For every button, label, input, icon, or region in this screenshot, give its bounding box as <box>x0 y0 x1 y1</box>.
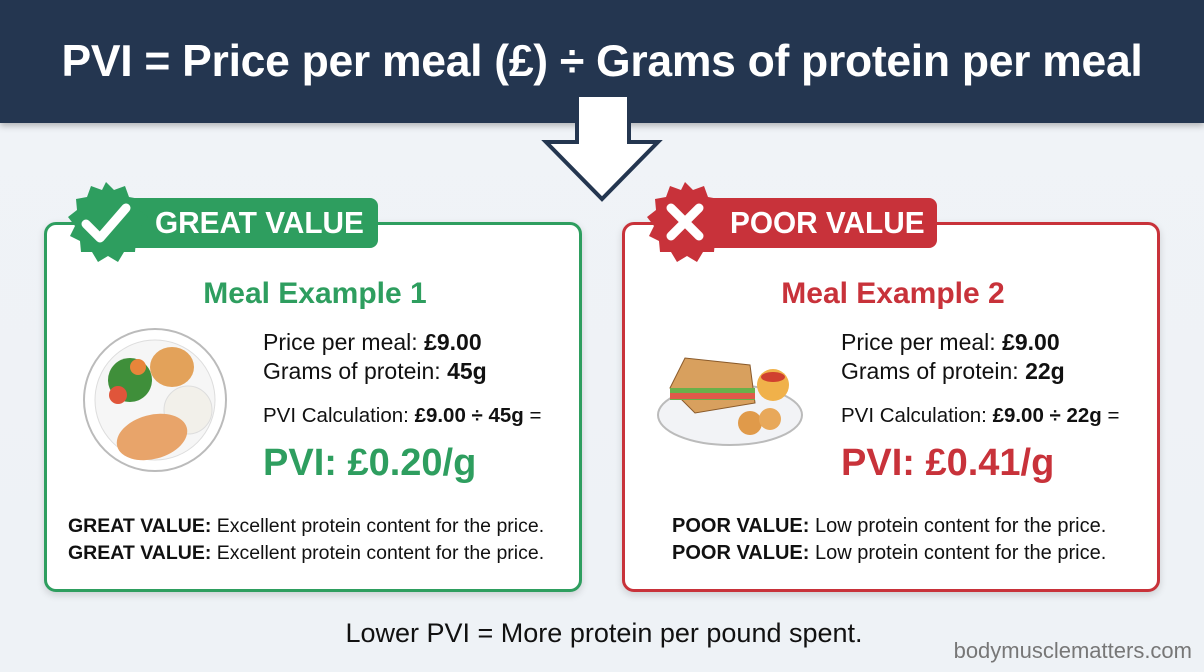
icon: sandwich plate <box>657 358 803 446</box>
footer statement: Lower PVI = More protein per pound spent. <box>345 618 863 648</box>
text: protein: Grams of protein: 22g <box>841 358 1065 384</box>
panel: poor value <box>622 222 1160 592</box>
badge: great value <box>68 182 378 262</box>
text: PVI result: PVI: £0.41/g <box>841 442 1054 484</box>
panel: great value <box>44 222 582 592</box>
watermark: bodymusclematters.com <box>954 638 1192 663</box>
text: verdict: GREAT VALUE: Excellent protein content for the price. <box>68 515 544 537</box>
text: PVI result: PVI: £0.20/g <box>263 442 476 484</box>
text: price: Price per meal: £9.00 <box>263 329 482 355</box>
badge: poor value <box>647 182 937 262</box>
arrow: down <box>541 97 663 202</box>
meal title 1: Meal Example 1 <box>203 277 427 310</box>
text: verdict: POOR VALUE: Low protein content for the price. <box>672 542 1106 564</box>
badge: poor value: POOR VALUE <box>730 205 925 240</box>
title: PVI = Price per meal (£) ÷ Grams of protein per meal <box>62 37 1142 86</box>
text: protein: Grams of protein: 45g <box>263 358 487 384</box>
text: price: Price per meal: £9.00 <box>841 329 1060 355</box>
text: verdict <box>672 515 1106 564</box>
badge: great value: GREAT VALUE <box>155 205 364 240</box>
text: verdict: GREAT VALUE: Excellent protein content for the price. <box>68 542 544 564</box>
meal title 2: Meal Example 2 <box>781 277 1005 310</box>
icon: plate with chicken <box>83 328 227 472</box>
text: calculation: PVI Calculation: £9.00 ÷ 45g = <box>263 404 542 427</box>
header bar <box>0 0 1204 123</box>
text: calculation: PVI Calculation: £9.00 ÷ 22g = <box>841 404 1120 427</box>
text: verdict <box>68 515 544 564</box>
text: verdict: POOR VALUE: Low protein content for the price. <box>672 515 1106 537</box>
